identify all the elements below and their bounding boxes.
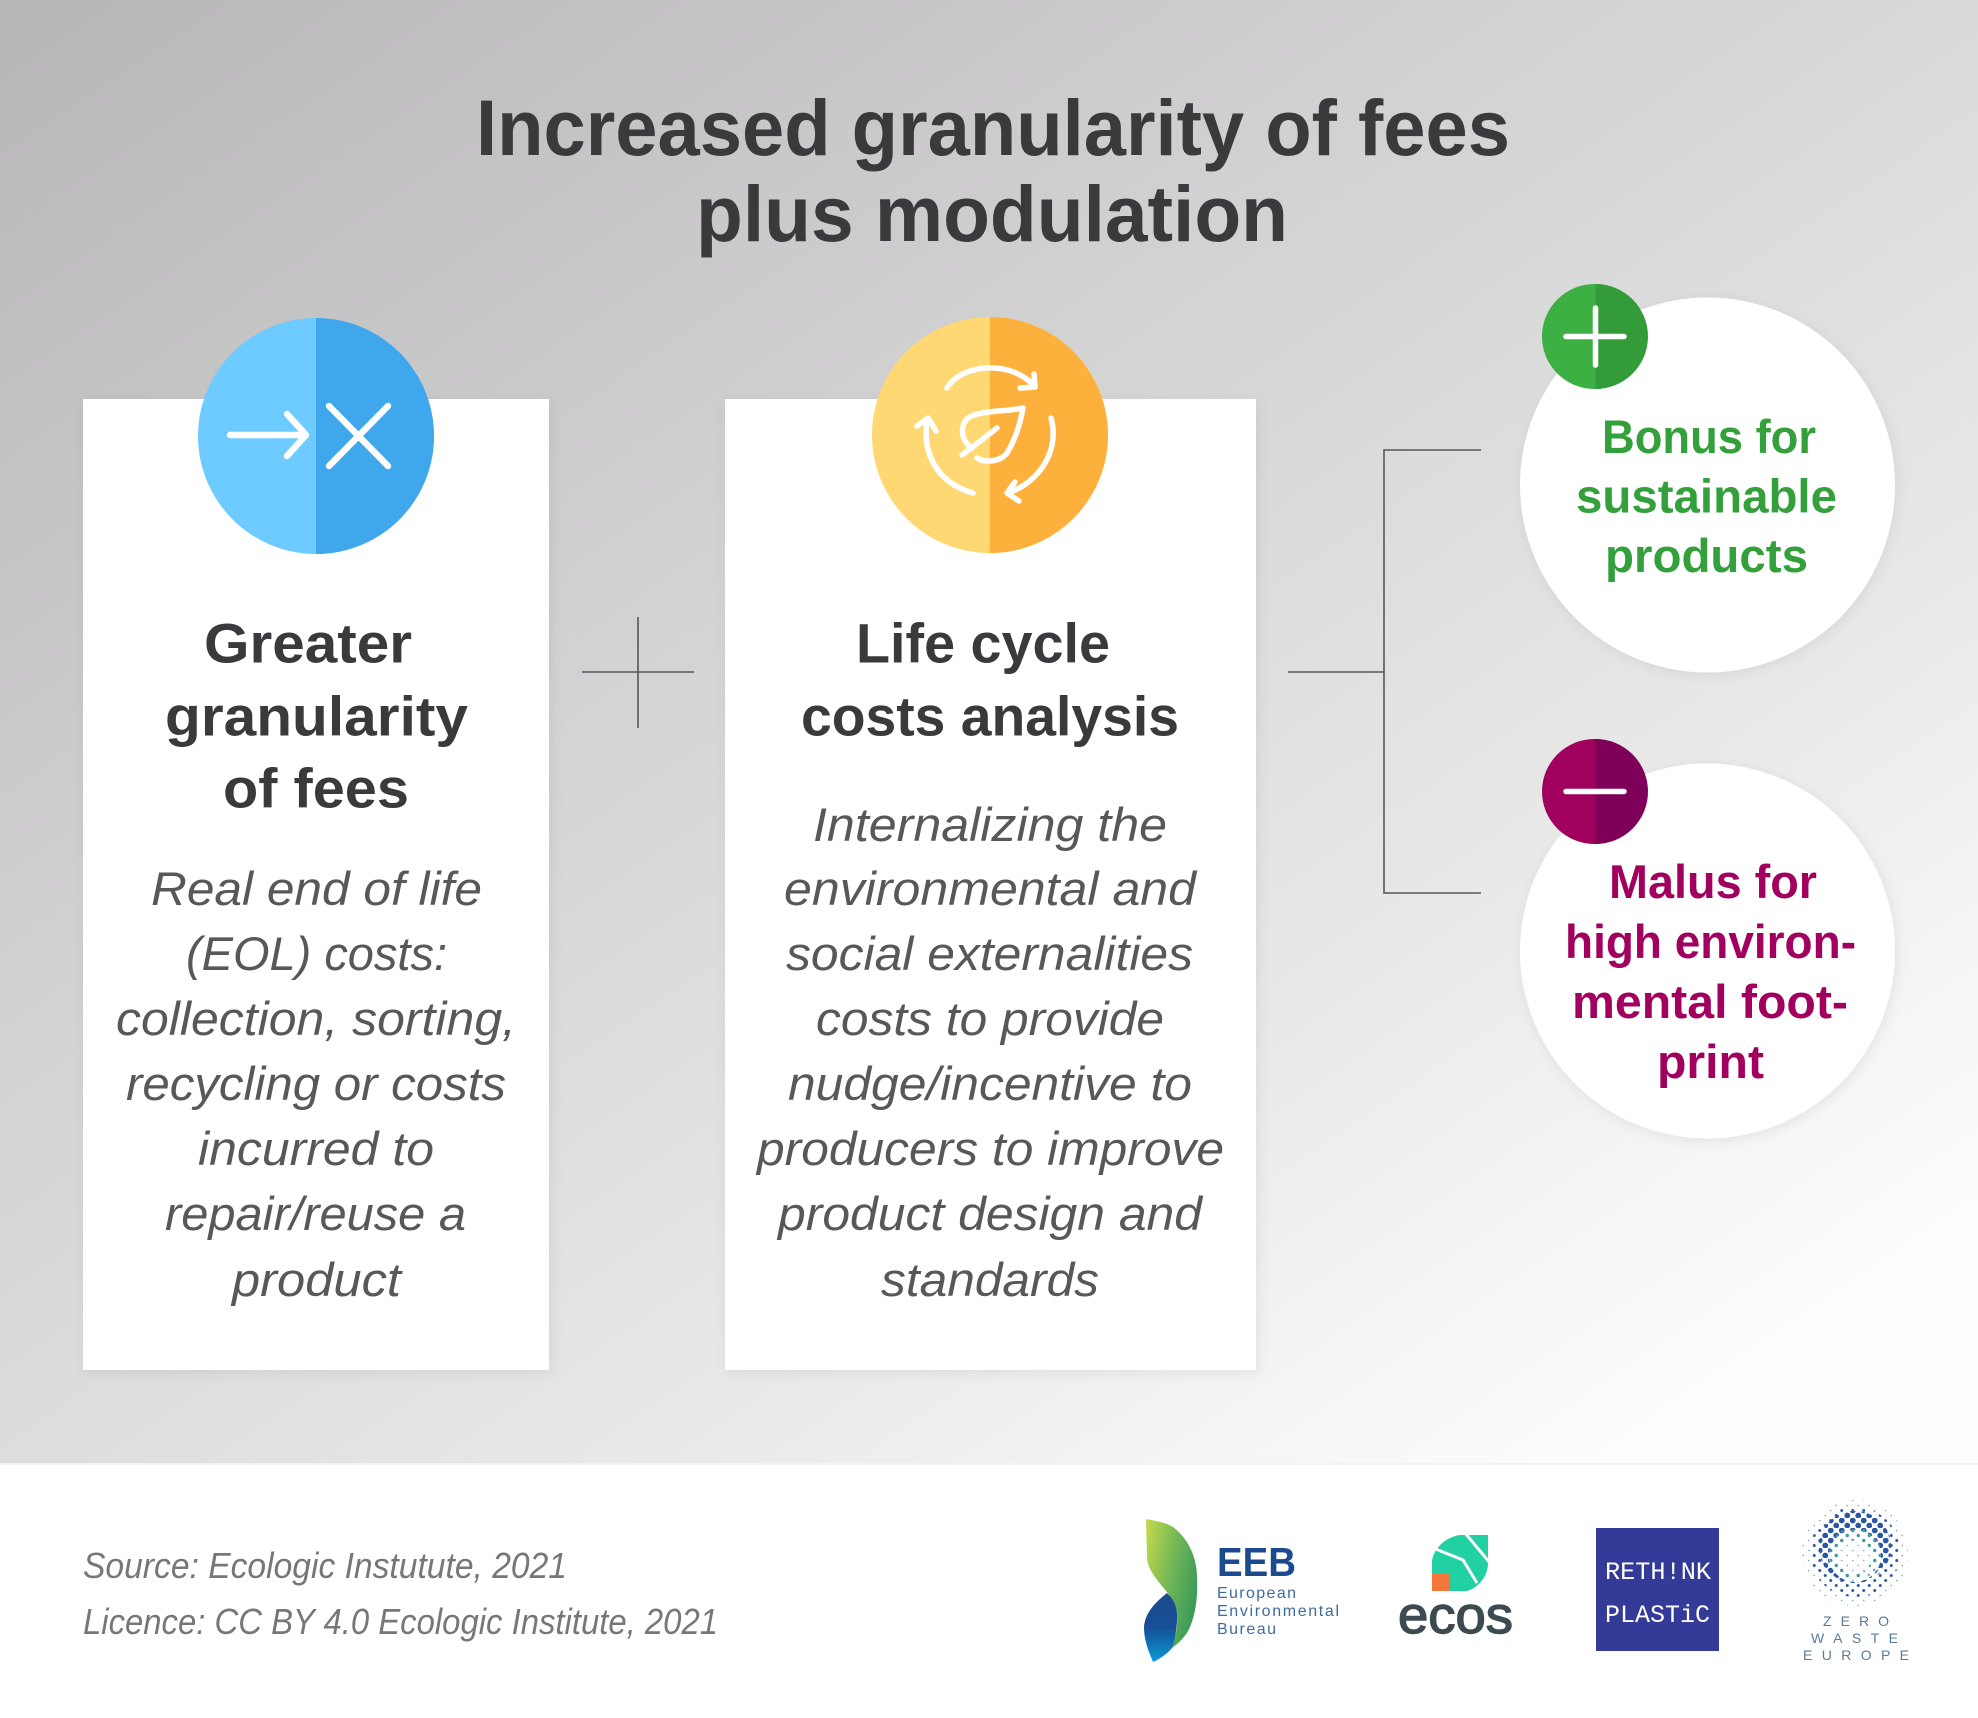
source and licence: Source: Ecologic Instutute, 2021 xyxy=(83,1545,567,1586)
title xyxy=(476,83,1510,258)
source and licence: Licence: CC BY 4.0 Ecologic Institute, 2021 xyxy=(83,1601,718,1642)
heading: life cycle costs analysis: Life cycle xyxy=(856,612,1110,674)
logo: EEB: Bureau xyxy=(1217,1621,1276,1638)
text: bonus for sustainable products: sustainable xyxy=(1576,470,1837,522)
text: real end of life costs xyxy=(116,862,516,1306)
heading: life cycle costs analysis: costs analysis xyxy=(801,684,1179,748)
text: malus for high environmental footprint: high environ- xyxy=(1565,915,1856,968)
heading: greater granularity of fees: granularity xyxy=(165,684,468,748)
plus sign connector xyxy=(582,617,694,728)
logo: zero waste europe: WASTE xyxy=(1811,1630,1898,1646)
text: real end of life costs: repair/reuse a xyxy=(165,1187,466,1240)
source and licence xyxy=(83,1545,718,1642)
panel: bonus xyxy=(1520,284,1895,672)
text: malus for high environmental footprint xyxy=(1565,855,1856,1088)
text: malus for high environmental footprint: Malus for xyxy=(1609,855,1817,908)
logo: ecos xyxy=(1398,1533,1513,1645)
logo: EEB: European xyxy=(1217,1585,1296,1602)
heading: greater granularity of fees: of fees xyxy=(223,756,409,820)
text: real end of life costs: Real end of life xyxy=(151,862,482,915)
text: real end of life costs: recycling or costs xyxy=(126,1057,506,1110)
text: malus for high environmental footprint: mental foot- xyxy=(1572,975,1848,1028)
text: internalizing externalities: costs to provide xyxy=(816,992,1164,1045)
logo: EEB: Environmental xyxy=(1217,1603,1339,1620)
text: bonus for sustainable products: Bonus for xyxy=(1602,410,1816,463)
logo: zero waste europe: ZERO xyxy=(1823,1613,1889,1629)
text: internalizing externalities: standards xyxy=(881,1253,1099,1306)
text: internalizing externalities: product design and xyxy=(776,1187,1204,1240)
icon: arrow and cross xyxy=(198,318,434,554)
logo: EEB xyxy=(1144,1519,1339,1662)
icon: plus badge xyxy=(1542,284,1648,389)
logo: rethink plastic: RETH!NK xyxy=(1605,1558,1711,1587)
logo: zero waste europe: EUROPE xyxy=(1803,1647,1909,1663)
text: bonus for sustainable products xyxy=(1576,410,1837,582)
logo: rethink plastic xyxy=(1596,1528,1719,1651)
panel: life cycle costs analysis xyxy=(725,317,1256,1370)
panel: greater granularity of fees xyxy=(83,318,549,1370)
footer band xyxy=(0,1463,1978,1718)
logo: rethink plastic: PLASTiC xyxy=(1605,1601,1710,1630)
text: internalizing externalities: environmental and xyxy=(784,862,1198,915)
text: internalizing externalities: social externalities xyxy=(786,927,1193,980)
text: real end of life costs: product xyxy=(230,1253,403,1306)
text: internalizing externalities: producers to improve xyxy=(755,1122,1224,1175)
heading: greater granularity of fees: Greater xyxy=(204,612,412,674)
text: internalizing externalities: nudge/incentive to xyxy=(788,1057,1192,1110)
icon: minus badge xyxy=(1542,739,1648,844)
text: real end of life costs: incurred to xyxy=(198,1122,434,1175)
heading: greater granularity of fees xyxy=(165,612,468,820)
logo: ecos: ecos xyxy=(1398,1587,1513,1645)
heading: life cycle costs analysis xyxy=(801,612,1179,748)
title: plus modulation xyxy=(696,169,1288,258)
text: real end of life costs: collection, sorting, xyxy=(116,992,516,1045)
text: malus for high environmental footprint: print xyxy=(1657,1035,1764,1088)
text: bonus for sustainable products: products xyxy=(1605,529,1808,582)
text: real end of life costs: (EOL) costs: xyxy=(186,927,447,980)
text: internalizing externalities: Internalizing the xyxy=(813,798,1167,851)
bracket connector xyxy=(1288,450,1481,893)
logo: EEB: EEB xyxy=(1217,1539,1296,1585)
logo: zero waste europe xyxy=(1802,1500,1909,1663)
panel: malus xyxy=(1520,739,1895,1138)
icon: recycling arrows around leaf xyxy=(872,317,1108,553)
title: Increased granularity of fees xyxy=(476,83,1510,172)
text: internalizing externalities xyxy=(755,798,1224,1306)
